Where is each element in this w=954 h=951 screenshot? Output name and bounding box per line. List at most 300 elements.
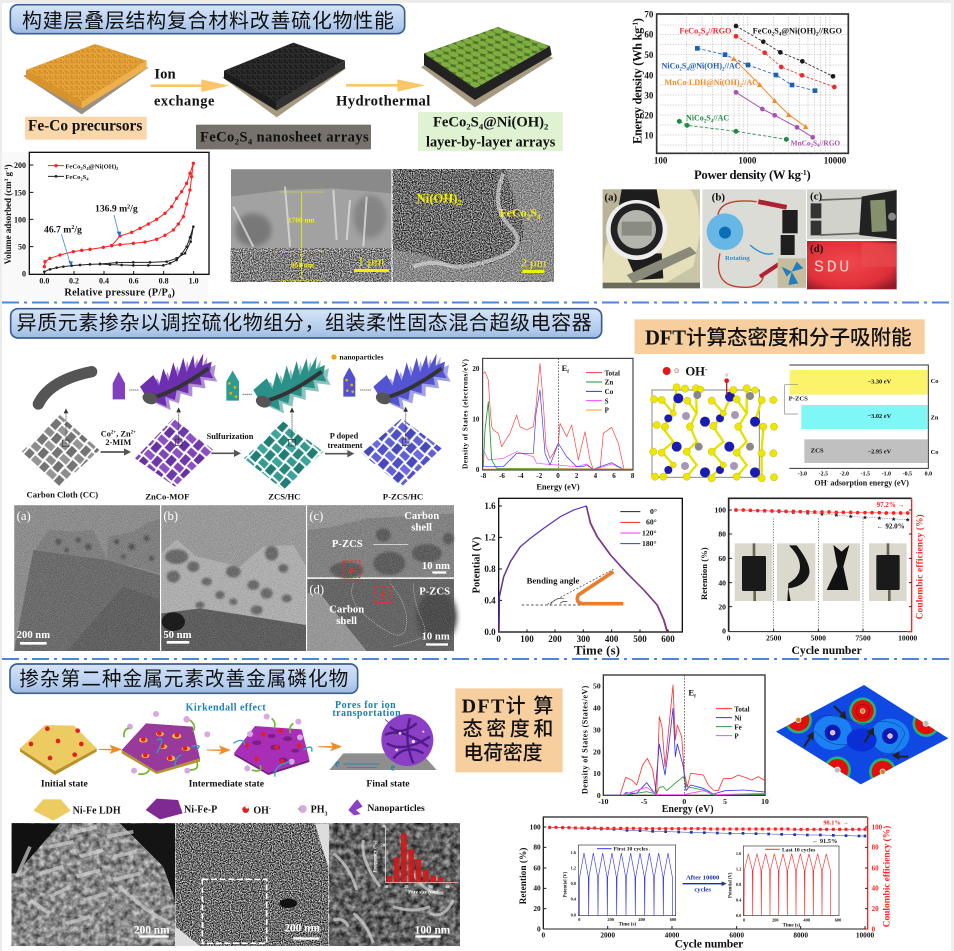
chart: Ragone plot energy vs power density: //RGO [817, 26, 842, 35]
inset chart: first 10 cycles: 0.4 [571, 897, 577, 902]
photo (a): TEM low magnification: 200 nm [17, 630, 50, 641]
chart: Ragone plot energy vs power density: 60 [644, 30, 654, 40]
label: FeCo2S4@Ni(OH)2 arrays [418, 112, 563, 151]
chart: bending GCD curves: 500 [633, 634, 647, 644]
chart: Ragone plot energy vs power density: 10 [644, 130, 654, 140]
diagram: intermediate state plate 1 [122, 711, 210, 774]
arrow: after 10000 cycles: After 10000 [686, 874, 720, 881]
chart: bending retention and coulombic efficiency: 5000 [811, 634, 826, 643]
heading: DFT density of states and adsorption energy: DFT计算态密度和分子吸附能 [645, 326, 912, 349]
photo (d): HRTEM: (d) [309, 582, 324, 596]
chart: OH adsorption energy: ZCS [811, 447, 824, 454]
inset chart: first 10 cycles: 400 [638, 917, 645, 922]
chart: BET adsorption isotherms: 0.2 [69, 276, 79, 285]
arrow: to pores [207, 746, 229, 754]
chart: Ragone plot energy vs power density: 70 [644, 10, 654, 20]
chart: bending retention and coulombic efficiency: 80 [718, 530, 726, 539]
chart: bending retention and coulombic efficiency: 0 [722, 626, 726, 635]
chart: pore size histogram [374, 823, 458, 896]
chart: cycling stability: 60 [533, 863, 541, 872]
chart: bending GCD curves: 0° [650, 507, 657, 516]
chart: Ragone plot energy vs power density: 2 [704, 119, 707, 124]
section 2: heteroatom doping [11, 309, 602, 651]
diagram: crystal structure with OH adsorption: OH [685, 364, 705, 378]
chart: BET adsorption isotherms: Volume adsorbed (cm [3, 181, 13, 264]
chart: bending GCD curves: 300 [577, 634, 591, 644]
chart: density of states Ni-Fe-P: -10 [598, 797, 609, 806]
photo (c): calculator [807, 189, 897, 239]
arrow: after 10000 cycles [683, 874, 727, 894]
chart: cycling stability: 100 [530, 822, 541, 831]
chart: bending retention and coulombic efficiency: Cycle number [792, 644, 862, 657]
chart: density of states Ni-Fe-P: 5 [723, 797, 727, 806]
inset chart: last 10 cycles: 400 [803, 918, 810, 923]
label: ion exchange: exchange [154, 93, 214, 109]
label: ion exchange [154, 66, 214, 109]
chart: cycling stability: 0 [872, 925, 876, 933]
labels: process steps: Co [101, 429, 111, 438]
chart: Ragone plot energy vs power density: MnCo-LDH@Ni(OH) [665, 78, 740, 87]
diagram: initial state plate [20, 725, 97, 775]
labels: process steps: 2-MIM [105, 438, 131, 447]
labels: states: Final state [366, 778, 410, 789]
diagram: carbon cloth [22, 408, 99, 487]
chart: Ragone plot energy vs power density: S [813, 138, 817, 147]
chart: pore size histogram: 40 [445, 884, 450, 889]
chart: density of states Ni-Fe-P: P [734, 732, 739, 740]
labels: materials [27, 490, 423, 501]
chart: cycling stability: Retention (%) [518, 848, 529, 904]
chart: OH adsorption energy: −2.95 eV [868, 449, 892, 456]
chart: pore size histogram: 30 [381, 823, 385, 828]
label: FeCo2S4@Ni(OH)2 arrays: 2 [544, 122, 548, 132]
chart: density of states Ni-Fe-P: 10 [593, 769, 601, 778]
label: FeCo2S4@Ni(OH)2 arrays: @Ni(OH) [483, 115, 544, 131]
chart: OH adsorption energy: 0.0 [925, 471, 932, 477]
chart: Ragone plot energy vs power density: 2 [740, 84, 743, 89]
label: FeCo2S4@Ni(OH)2 arrays: FeCo [433, 115, 466, 131]
legend: materials: PH [311, 805, 325, 816]
chart: density of states Ni-Fe-P: 50 [593, 682, 601, 691]
chart: bending retention and coulombic efficiency: 60 [718, 554, 726, 563]
inset chart: last 10 cycles: 200 [772, 918, 779, 923]
photo: SEM top view: 2 [527, 212, 531, 221]
chart: density of states P-ZCS: Energy (eV) [536, 482, 580, 491]
chart: BET adsorption isotherms: 136.9 m [95, 204, 127, 215]
section 1: energy chart and device photos [603, 10, 897, 289]
chart: density of states Ni-Fe-P [580, 675, 769, 815]
chart: Ragone plot energy vs power density: 50 [644, 50, 654, 60]
chart: density of states Ni-Fe-P: 30 [593, 726, 601, 735]
section 1: layered sulfide composites [2, 5, 563, 300]
chart: BET adsorption isotherms: 200 [14, 161, 26, 170]
chart: BET adsorption isotherms: 2 [71, 225, 74, 231]
photo: SEM top view: FeCo [499, 206, 527, 220]
photo (c): HRTEM: shell [411, 523, 432, 534]
chart: cycling stability: ← 91.5% [812, 838, 837, 845]
labels: process steps: Sulfurization [207, 432, 254, 441]
labels: process steps: 2+ [111, 431, 116, 436]
chart: Ragone plot energy vs power density: MnCo [791, 138, 811, 147]
diagram: final state nanosheet particle: e [391, 763, 396, 774]
chart: Ragone plot energy vs power density: 1000 [738, 155, 757, 165]
chart: Ragone plot energy vs power density: Energy density (Wh kg [631, 28, 645, 144]
chart: density of states P-ZCS: Density of States (electrons/eV) [461, 358, 470, 469]
chart: cycling stability: 40 [533, 884, 541, 893]
chart: bending retention and coulombic efficiency: Coulombic efficiency (%) [915, 514, 926, 619]
label: FeCo2S4 nanosheet arrays: FeCo [200, 130, 234, 146]
chart: density of states P-ZCS: 4 [594, 472, 598, 480]
labels: process steps: treatment [327, 441, 363, 450]
photo: SEM top view [393, 169, 554, 282]
photo (c): calculator: (c) [810, 190, 823, 202]
labels: states [41, 778, 410, 789]
chart: BET adsorption isotherms: -1 [4, 167, 10, 172]
label: FeCo2S4@Ni(OH)2 arrays: layer-by-layer arrays [426, 135, 556, 151]
chart: OH adsorption energy [785, 365, 939, 487]
chart: cycling stability: 0 [537, 924, 541, 933]
chart: OH adsorption energy: −3.30 eV [868, 378, 892, 385]
chart: Ragone plot energy vs power density: -1 [631, 22, 640, 28]
inset chart: first 10 cycles: 0.8 [571, 881, 577, 886]
label: Kirkendall effect: Kirkendall effect [186, 702, 266, 713]
chart: Ragone plot energy vs power density: ) [806, 168, 811, 182]
chart: bending retention and coulombic efficiency: 10000 [898, 634, 917, 643]
chart: Ragone plot energy vs power density: 2 [772, 32, 775, 37]
chart: OH adsorption energy: -0.5 [903, 471, 912, 477]
chart: Ragone plot energy vs power density: NiCo [662, 62, 679, 71]
chart: bending GCD curves: 0.4 [484, 595, 496, 605]
chart: density of states Ni-Fe-P: Fe [734, 723, 742, 731]
photo (d): HRTEM: shell [336, 616, 357, 627]
chart: BET adsorption isotherms: ) [3, 164, 13, 167]
photo (d): red LED display: SDU [814, 259, 852, 278]
legend: nanoparticles: nanoparticles [339, 352, 384, 361]
label: hydrothermal: Hydrothermal [336, 94, 430, 110]
chart: OH adsorption energy: -2.0 [840, 471, 849, 477]
photo (c): HRTEM [307, 505, 454, 578]
inset chart: last 10 cycles: 0 [743, 918, 745, 923]
chart: bending GCD curves: 100 [520, 634, 534, 644]
chart: cycling stability: 20 [872, 905, 879, 913]
photo (d): HRTEM: Carbon [329, 604, 364, 615]
inset chart: first 10 cycles: 0.0 [571, 912, 576, 917]
chart: BET adsorption isotherms: 0 [22, 269, 26, 278]
chart: cycling stability: Cycle number [675, 937, 743, 950]
chart: Ragone plot energy vs power density: S [774, 26, 779, 35]
inset chart: first 10 cycles: First 10 cycles [614, 847, 649, 853]
chart: bending GCD curves: Time (s) [574, 644, 620, 658]
chart: Ragone plot energy vs power density: 30 [644, 90, 654, 100]
heading: section 1 title: 构建层叠层结构复合材料改善硫化物性能 [22, 9, 394, 32]
photo (a): TEM low magnification: (a) [17, 509, 31, 523]
chart: bending retention and coulombic efficiency: 20 [718, 602, 726, 611]
inset chart: first 10 cycles: Time (s) [619, 923, 636, 928]
photo (b): TEM nanoparticles [161, 505, 306, 651]
labels: materials: Carbon Cloth (CC) [27, 490, 98, 500]
inset chart: first 10 cycles: 1.2 [571, 866, 576, 871]
icon: MOF sheet and fiber [113, 353, 217, 410]
photo (d): red LED display [807, 241, 897, 289]
photo (c): HRTEM: P-ZCS [332, 539, 363, 550]
label: pores for ion transportation: Pores for ion [335, 700, 396, 711]
chart: density of states P-ZCS: 20 [472, 365, 480, 373]
label: FeCo2S4 nanosheet arrays: 4 [248, 137, 253, 147]
chart: bending GCD curves: 1.6 [484, 501, 496, 511]
photo (a): wristwatch [603, 189, 700, 288]
photo: SEM Ni-Fe-P: 200 nm [134, 924, 170, 936]
chart: density of states P-ZCS: S [605, 397, 609, 405]
chart: Ragone plot energy vs power density: //RGO [818, 138, 840, 147]
chart: cycling stability: 100 [872, 823, 883, 831]
photo: SEM cross-section: 1700 nm [288, 216, 315, 225]
photo: SEM top view: 2 µm [521, 255, 547, 269]
chart: OH adsorption energy: −3.02 eV [868, 413, 892, 420]
photo (d): HRTEM: f [381, 590, 385, 602]
chart: density of states Ni-Fe-P: -5 [641, 797, 647, 806]
chart: pore size histogram: 20 [381, 843, 385, 848]
chart: bending retention and coulombic efficiency: 7500 [855, 634, 871, 643]
chart: Ragone plot energy vs power density: //RGO [707, 27, 732, 36]
chart: density of states Ni-Fe-P: Total [734, 705, 750, 713]
section 2: DFT and electrochemistry [461, 319, 939, 658]
label: pores for ion transportation: transportation [332, 708, 401, 719]
chart: BET adsorption isotherms: 150 [14, 188, 26, 197]
chart: OH adsorption energy: -2.5 [819, 471, 828, 477]
photo: SEM top view: S [530, 206, 537, 220]
chart: Ragone plot energy vs power density: Power density (W kg [694, 168, 801, 182]
chart: bending GCD curves: Potential (V) [472, 537, 483, 593]
photo (d): red LED display: (d) [810, 243, 824, 255]
label: Fe-Co precursors: Fe-Co precursors [28, 117, 142, 134]
photo: SEM with pore size histogram [329, 823, 460, 946]
arrow: to intermediate [99, 746, 121, 753]
heading: section 2 title: 异质元素掺杂以调控硫化物组分，组装柔性固态混合超级电容器 [17, 311, 592, 334]
chart: BET adsorption isotherms: 0.8 [159, 276, 169, 285]
photo (b): rotating fan: (b) [712, 192, 725, 204]
photo: SEM cross-section: 850 nm [291, 261, 314, 270]
chart: OH adsorption energy: -3.0 [798, 471, 807, 477]
chart: OH adsorption energy: OH [814, 478, 827, 487]
chart: bending GCD curves: 0.0 [484, 627, 496, 637]
chart: BET adsorption isotherms: 4 [86, 166, 89, 171]
chart: bending GCD curves: 0.8 [484, 564, 496, 574]
chart: Ragone plot energy vs power density: 10000 [824, 155, 847, 165]
chart: BET adsorption isotherms: 0.0 [39, 276, 49, 285]
chart: pore size histogram: 30 [428, 884, 433, 889]
heading: DFT density of states and adsorption energy [635, 319, 925, 354]
chart: BET adsorption isotherms: 46.7 m [44, 224, 71, 235]
chart: cycling stability: 6000 [729, 930, 744, 939]
chart: OH adsorption energy: adsorption energy (eV) [828, 478, 909, 487]
diagram: layer-by-layer green plate [421, 27, 553, 107]
legend: materials: OH [253, 805, 269, 816]
diagram: ZnCo-MOF cloth [135, 407, 213, 487]
legend: materials [33, 799, 425, 821]
labels: process steps: P doped [330, 431, 359, 440]
icon: ZCS sheet and fiber [226, 357, 331, 413]
chart: Ragone plot energy vs power density: 4 [817, 144, 820, 149]
photo (b): rotating fan: Rotating [725, 255, 750, 262]
icon: bare carbon fiber [38, 372, 92, 404]
chart: density of states P-ZCS: Zn [605, 379, 613, 387]
photo (d): HRTEM: P-ZCS [419, 587, 450, 598]
photo: SEM with pore size histogram: 100 nm [415, 924, 451, 936]
chart: bending retention and coulombic efficiency: Retention (%) [699, 547, 709, 600]
chart: cycling stability [518, 817, 893, 950]
chart: Ragone plot energy vs power density: 20 [644, 110, 654, 120]
photo (d): HRTEM: 10 nm [422, 632, 450, 643]
photo: SEM top view: 4 [537, 212, 541, 221]
section 3: DFT and cycling [455, 675, 948, 950]
chart: bending retention and coulombic efficiency: 97.2% → [877, 501, 905, 509]
photo (a): wristwatch: (a) [604, 192, 617, 204]
chart: Ragone plot energy vs power density: S [682, 62, 687, 71]
chart: cycling stability: 20 [533, 904, 541, 913]
chart: Ragone plot energy vs power density: 40 [644, 70, 654, 80]
chart: pore size histogram: 10 [384, 884, 388, 889]
section 3: second-metal doping [10, 664, 460, 946]
inset chart: first 10 cycles [564, 845, 676, 928]
photo (c): HRTEM: e [349, 564, 354, 576]
legend: materials: Ni-Fe-P [184, 804, 217, 815]
chart: bending retention and coulombic efficiency: 100 [715, 506, 726, 515]
labels: states: Intermediate state [189, 778, 265, 789]
photo: SEM top view: 2 [457, 198, 461, 207]
chart: density of states Ni-Fe-P: 0 [682, 797, 686, 806]
photo (b): TEM nanoparticles: (b) [163, 509, 178, 523]
chart: OH adsorption energy: Co [931, 449, 938, 456]
photo (a): TEM low magnification [14, 505, 160, 651]
chart: bending retention and coulombic efficiency [699, 498, 926, 657]
chart: bending retention and coulombic efficiency: 0 [727, 634, 731, 643]
chart: bending retention and coulombic efficiency: 40 [718, 578, 726, 587]
diagram: intermediate state plate 2 with pores [233, 714, 312, 777]
chart: density of states P-ZCS: Co [605, 388, 614, 396]
chart: OH adsorption energy: Co [931, 378, 938, 385]
diagram: crystal structure with OH adsorption: - [705, 364, 708, 373]
heading: section 3 title: 掺杂第二种金属元素改善金属磷化物 [19, 668, 348, 690]
labels: states: Initial state [41, 778, 89, 789]
chart: bending GCD curves: 120° [642, 528, 657, 537]
inset chart: last 10 cycles: 1.2 [736, 867, 741, 872]
chart: OH adsorption energy: -1.5 [861, 471, 870, 477]
legend: materials: Nanoparticles [367, 803, 425, 814]
icon: P-ZCS sheet and fiber [343, 353, 451, 410]
heading: DFT density of states and charge density [455, 688, 563, 772]
chart: Ragone plot energy vs power density: -1 [801, 168, 807, 177]
chart: OH adsorption energy: -1.0 [882, 471, 891, 477]
chart: Ragone plot energy vs power density: 4 [686, 68, 689, 73]
chart: bending GCD curves: 200 [548, 634, 562, 644]
chart: Ragone plot energy vs power density: S [701, 27, 706, 36]
chart: Ragone plot energy vs power density: S [706, 113, 711, 122]
chart: BET adsorption isotherms: 4 [86, 177, 89, 182]
inset chart: last 10 cycles: 0.0 [736, 913, 741, 918]
chart: cycling stability: 4000 [665, 930, 680, 939]
chart: Ragone plot energy vs power density: FeCo [753, 26, 772, 35]
label: ion exchange: Ion [154, 66, 176, 82]
chart: pore size histogram: Frequency (%) [374, 840, 379, 873]
inset chart: last 10 cycles [728, 846, 841, 928]
labels: process steps: , Zn [116, 429, 131, 438]
chart: Ragone plot energy vs power density: 4 [779, 32, 782, 37]
photo (c): HRTEM: Carbon [404, 511, 439, 522]
heading: DFT density of states and charge density: 电荷密度 [463, 741, 543, 764]
inset chart: first 10 cycles: 600 [670, 917, 676, 922]
chart: Ragone plot energy vs power density: @Ni(OH) [689, 62, 722, 71]
chart: pore size histogram: 20 [404, 884, 408, 889]
legend: materials: Ni-Fe LDH [73, 805, 121, 816]
chart: Ragone plot energy vs power density: 2 [722, 68, 725, 73]
chart: bending GCD curves: 180° [642, 539, 657, 548]
diagram: FeCo2S4 nanosheet plate [222, 43, 346, 117]
chart: BET adsorption isotherms: 2 [80, 166, 83, 171]
chart: pore size histogram: Pore size (nm) [408, 891, 439, 896]
chart: BET adsorption isotherms: Relative pressure (P/P [64, 288, 168, 299]
diagram: ZCS/HC cloth [244, 407, 323, 490]
label: FeCo2S4 nanosheet arrays: nanosheet arrays [253, 130, 369, 146]
inset chart: first 10 cycles: 0 [578, 917, 580, 922]
legend: materials: 3 [325, 811, 328, 817]
label: FeCo2S4 nanosheet arrays: S [239, 130, 248, 146]
diagram: Fe-Co precursor plate [23, 44, 148, 114]
chart: BET adsorption isotherms: FeCo [65, 163, 80, 170]
chart: Ragone plot energy vs power density: 4 [705, 33, 708, 38]
chart: BET adsorption isotherms: 0.6 [129, 276, 139, 285]
photo (b): rotating fan [702, 189, 806, 288]
chart: Ragone plot energy vs power density: 2 [679, 68, 682, 73]
chart: BET adsorption isotherms: 100 [14, 215, 26, 224]
chart: density of states Ni-Fe-P: E [688, 688, 694, 698]
diagram: P-ZCS/HC cloth [362, 407, 442, 487]
chart: density of states P-ZCS: -8 [480, 472, 487, 480]
chart: Ragone plot energy vs power density [631, 10, 848, 182]
chart: cycling stability: 80 [533, 843, 541, 852]
chart: bending GCD curves: 600 [661, 634, 675, 644]
label: FeCo2S4 nanosheet arrays: 2 [235, 137, 239, 147]
chart: OH adsorption energy: - [827, 480, 829, 485]
inset chart: first 10 cycles: Potential (V) [564, 871, 569, 897]
chart: bending GCD curves [472, 498, 682, 658]
chart: density of states P-ZCS: 0 [476, 466, 480, 474]
chart: density of states P-ZCS: E [562, 364, 567, 373]
label: pores for ion transportation [332, 700, 401, 719]
chart: Ragone plot energy vs power density: 2 [811, 144, 814, 149]
label: FeCo2S4@Ni(OH)2 arrays: 4 [479, 122, 484, 132]
chart: BET adsorption isotherms: g [3, 171, 13, 179]
label: FeCo2S4@Ni(OH)2 arrays: 2 [466, 122, 471, 132]
heading: DFT density of states and charge density: 态 密 度 和 [463, 718, 553, 741]
chart: BET adsorption isotherms: 50 [18, 243, 26, 252]
arrow: hydrothermal [346, 79, 425, 92]
diagram: fiber and cloth process row [22, 352, 451, 501]
inset chart: last 10 cycles: 600 [835, 918, 841, 923]
labels: materials: P-ZCS/HC [383, 491, 423, 501]
chart: cycling stability: 10000 [856, 930, 874, 939]
inset chart: last 10 cycles: Potential (V) [728, 872, 733, 898]
labels: process steps [101, 429, 363, 450]
photo (c): HRTEM: (c) [309, 509, 323, 523]
photo: SEM top view: Ni(OH) [417, 191, 457, 205]
chart: cycling stability: 40 [872, 885, 879, 893]
photo: TEM porous structure: 200 nm [284, 923, 320, 935]
label: Fe-Co precursors [25, 117, 147, 140]
chart: bending GCD curves: 60° [646, 518, 657, 527]
chart: Ragone plot energy vs power density: 2 [698, 33, 701, 38]
chart: density of states Ni-Fe-P: Density of States (States/eV) [580, 685, 589, 794]
chart: density of states P-ZCS: -6 [499, 472, 505, 480]
